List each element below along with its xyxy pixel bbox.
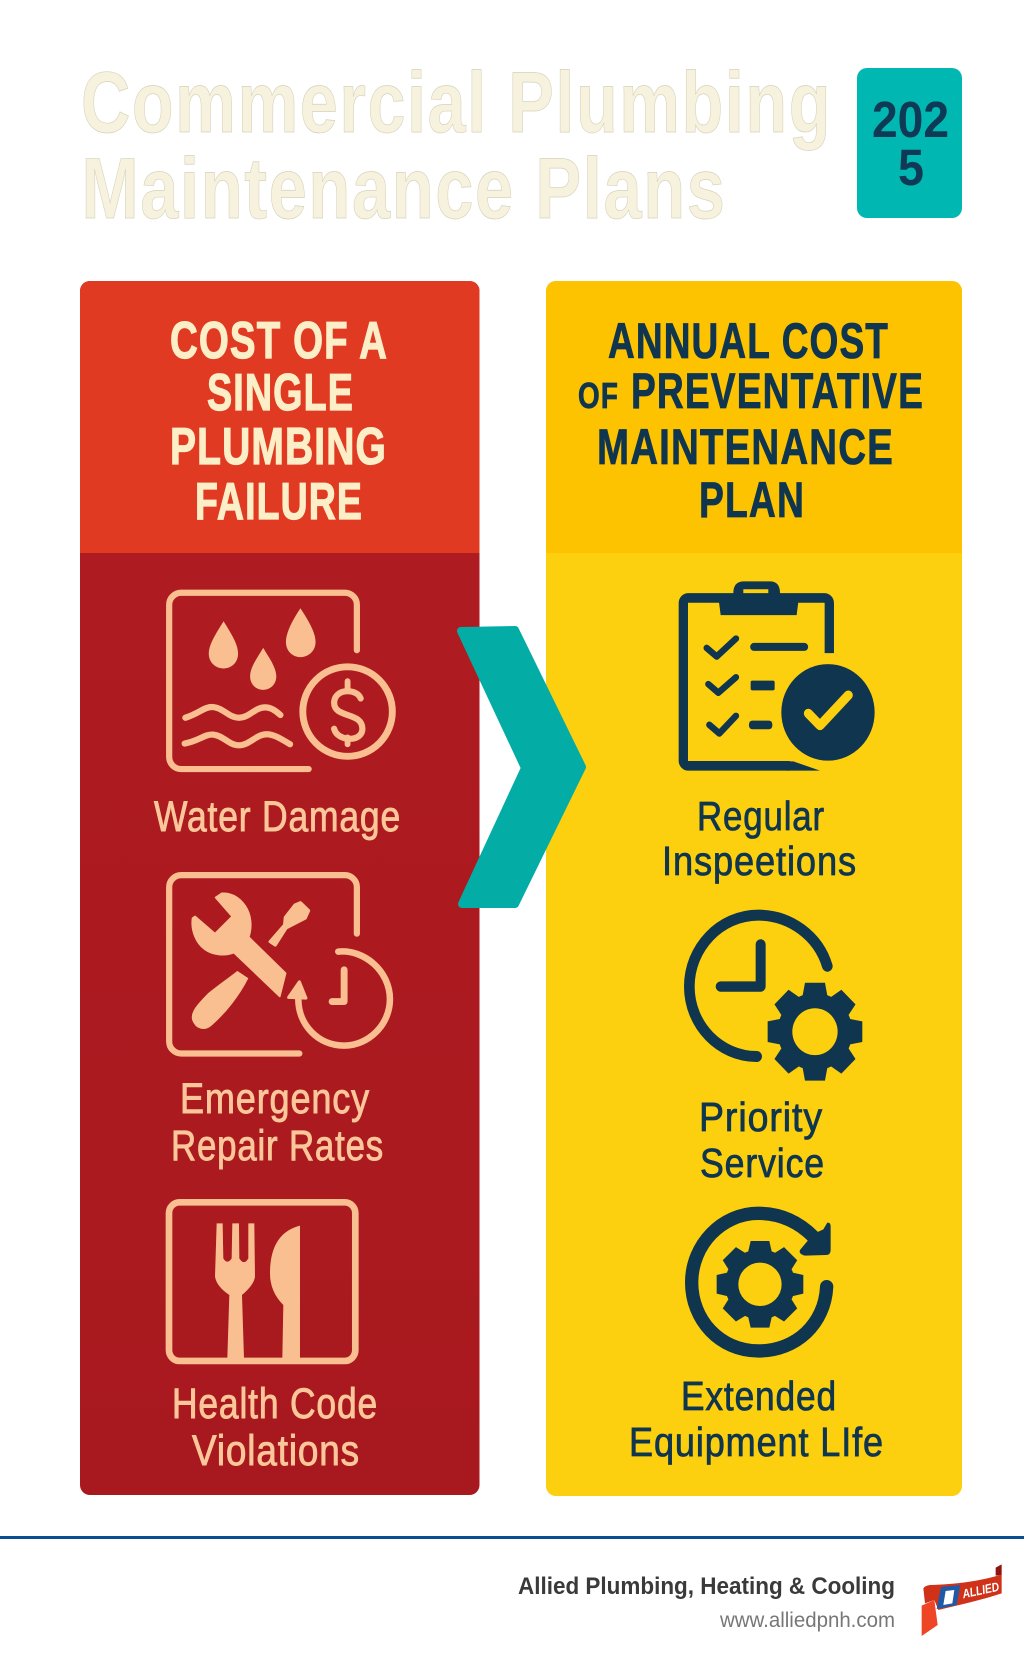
icon: emergency repair	[169, 875, 390, 1054]
icon: clock and gear	[689, 915, 862, 1081]
label: extended equipment life: Extended	[681, 1373, 837, 1419]
panel: cost of a single plumbing failure	[80, 281, 480, 1495]
heading: annual cost of preventative maintenance plan: OF	[578, 375, 619, 416]
year badge: 202	[872, 91, 949, 148]
title: Commercial Plumbing	[81, 55, 832, 151]
icon: gear with circular arrow	[692, 1213, 831, 1351]
heading: cost of a single plumbing failure: PLUMBING	[170, 418, 387, 476]
title: Maintenance Plans	[82, 141, 726, 237]
label: emergency repair rates: Repair Rates	[171, 1122, 384, 1170]
year badge	[857, 68, 962, 218]
icon: clipboard checklist	[683, 581, 877, 771]
icon: health code violations	[169, 1202, 355, 1361]
panel background: yellow	[546, 281, 962, 1496]
panel: annual cost of preventative maintenance plan	[546, 281, 962, 1496]
label: health code violations: Health Code	[172, 1380, 378, 1428]
heading: cost of a single plumbing failure	[170, 312, 388, 531]
label: water damage: Water Damage	[154, 793, 401, 841]
footer: company name: Allied Plumbing, Heating & Cooling	[518, 1573, 895, 1600]
label: priority service: Service	[700, 1140, 825, 1186]
title	[81, 55, 832, 237]
heading: annual cost of preventative maintenance plan: MAINTENANCE	[597, 419, 894, 475]
heading: annual cost of preventative maintenance plan: PREVENTATIVE	[631, 363, 924, 419]
label: emergency repair rates: Emergency	[180, 1075, 370, 1123]
label: priority service: Priority	[699, 1094, 823, 1140]
heading: annual cost of preventative maintenance plan: PLAN	[699, 472, 805, 528]
panel background: red	[80, 281, 480, 1495]
icon: water damage	[169, 593, 392, 769]
year badge: 5	[898, 139, 924, 196]
label: health code violations	[172, 1380, 378, 1475]
label: regular inspections: Inspeetions	[662, 838, 857, 884]
heading: cost of a single plumbing failure: FAILURE	[195, 473, 363, 531]
label: extended equipment life: Equipment LIfe	[629, 1419, 884, 1465]
heading: annual cost of preventative maintenance plan	[578, 313, 924, 528]
label: emergency repair rates	[171, 1075, 384, 1170]
heading: cost of a single plumbing failure: SINGLE	[207, 364, 354, 422]
label: regular inspections: Regular	[697, 793, 825, 839]
panel header: red	[80, 281, 480, 553]
label: regular inspections	[662, 793, 857, 884]
heading: cost of a single plumbing failure: COST OF A	[170, 312, 388, 370]
logo: allied ribbon	[922, 1564, 1002, 1636]
heading: annual cost of preventative maintenance plan: ANNUAL COST	[608, 313, 889, 369]
panel header: yellow	[546, 281, 962, 553]
logo: allied ribbon: ALLIED	[960, 1580, 1000, 1601]
label: extended equipment life	[629, 1373, 884, 1465]
arrow: chevron from cost to plan	[461, 630, 582, 904]
footer: website: www.alliedpnh.com	[719, 1609, 895, 1632]
label: health code violations: Violations	[192, 1427, 360, 1475]
label: priority service	[699, 1094, 825, 1186]
footer rule	[0, 1536, 1024, 1539]
